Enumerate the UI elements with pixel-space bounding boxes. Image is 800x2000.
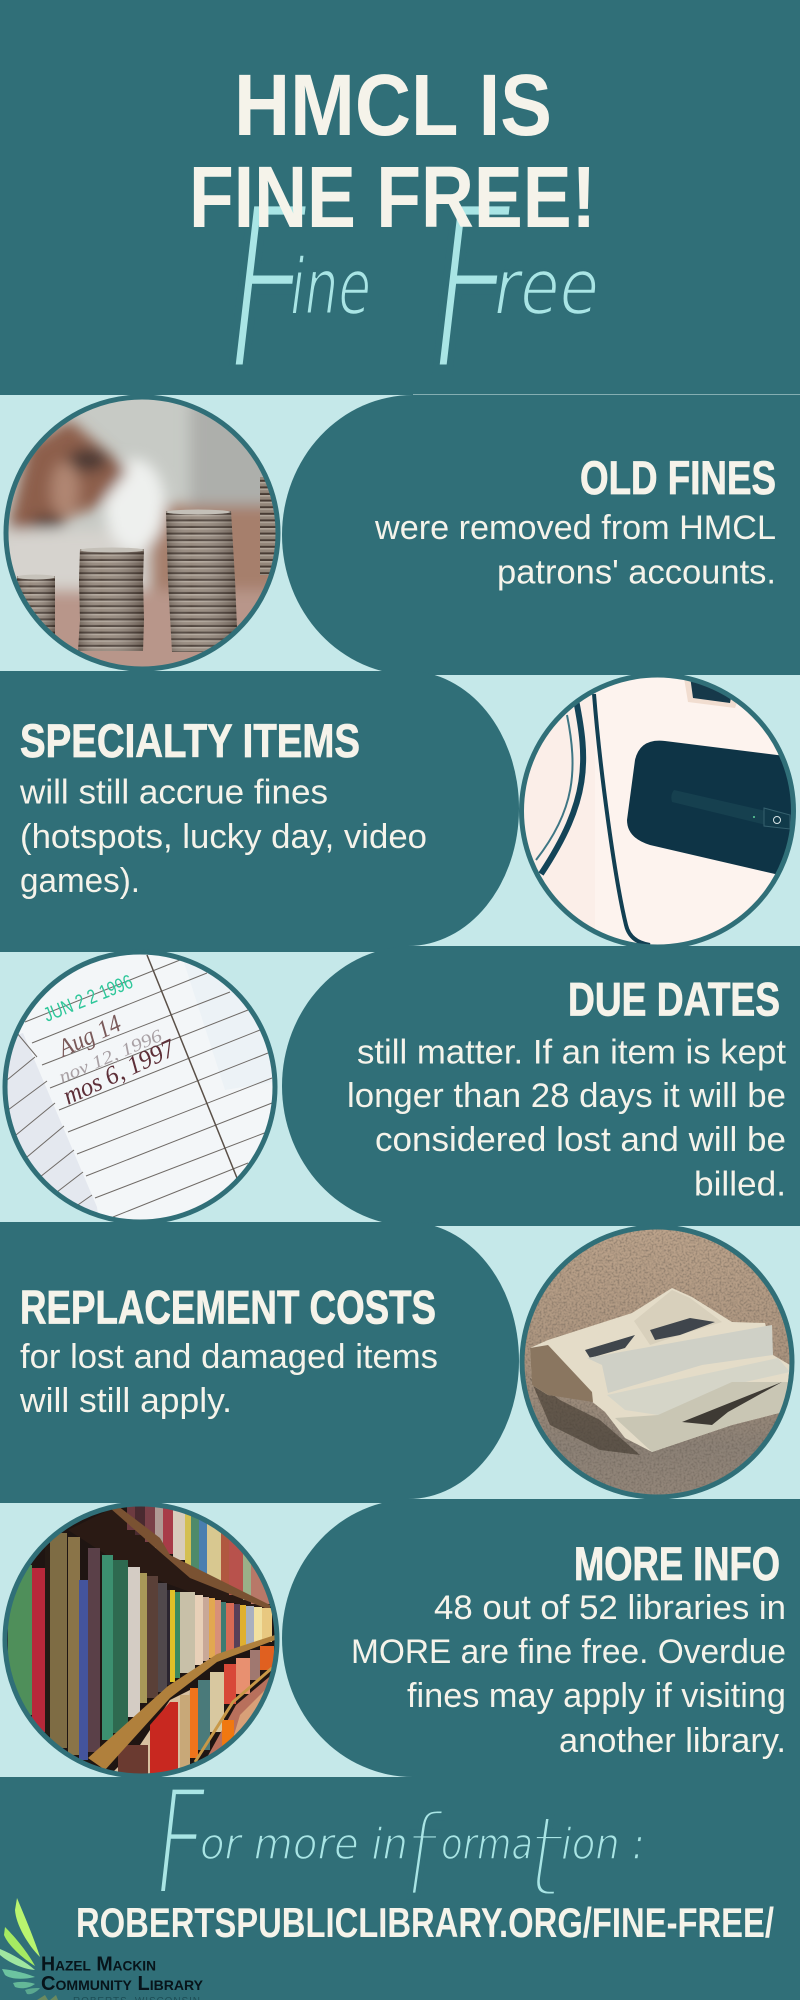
photo: ledger card: JUN 2 2 1996 — [41, 971, 136, 1027]
body: specialty items — [19, 774, 427, 900]
body: specialty items: (hotspots, lucky day, video — [20, 818, 427, 856]
body: replacement costs: will still apply. — [19, 1382, 232, 1420]
photo: ledger card: nov 12, 1996 — [56, 1025, 165, 1087]
body: due dates: still matter. If an item is kept — [357, 1034, 787, 1072]
logo: hazel mackin community library — [0, 1898, 204, 2000]
panel: due dates — [0, 946, 800, 1230]
photo: coin stacks — [0, 395, 285, 680]
body: due dates: longer than 28 days it will be — [347, 1077, 786, 1115]
panel: old fines — [0, 395, 800, 680]
script subtitle: F — [228, 155, 310, 425]
body: old fines: were removed from HMCL — [374, 509, 776, 547]
body: old fines: patrons' accounts. — [497, 554, 776, 592]
heading: replacement costs: REPLACEMENT COSTS — [20, 1280, 436, 1334]
photo: ledger card: mos 6, 1997 — [58, 1033, 180, 1110]
photo: ledger card — [0, 950, 285, 1230]
heading: specialty items: SPECIALTY ITEMS — [20, 714, 360, 767]
body: more info: fines may apply if visiting — [407, 1677, 786, 1715]
body: more info: another library. — [559, 1722, 786, 1760]
photo: weathered book on gravel — [515, 1222, 800, 1502]
title: HMCL IS — [234, 57, 552, 154]
logo wordmark: Community Library — [41, 1973, 204, 1995]
script call to action: or more in — [200, 1819, 408, 1870]
body: due dates: considered lost and will be — [375, 1121, 786, 1159]
body: more info: 48 out of 52 libraries in — [434, 1589, 786, 1627]
body: old fines — [374, 509, 776, 592]
script subtitle: F — [432, 155, 514, 425]
panel: more info — [0, 1499, 800, 1785]
script call to action: ion : — [561, 1819, 645, 1870]
photo: bookshelf — [0, 1500, 285, 1785]
logo wordmark — [41, 1954, 204, 2000]
icon: wing feathers — [0, 1898, 58, 2000]
body: specialty items: games). — [20, 862, 140, 900]
logo wordmark: Hazel Mackin — [41, 1954, 156, 1976]
body: due dates: billed. — [694, 1166, 786, 1204]
body: due dates — [347, 1034, 787, 1204]
body: replacement costs: for lost and damaged items — [20, 1338, 438, 1376]
script call to action: t — [528, 1790, 565, 1925]
script call to action: F — [156, 1757, 208, 1931]
panel: replacement costs — [0, 1222, 800, 1502]
body: replacement costs — [19, 1338, 438, 1420]
script subtitle: ine — [290, 243, 388, 333]
panel: specialty items — [0, 670, 800, 950]
body: specialty items: will still accrue fines — [19, 774, 328, 812]
script call to action: orma — [441, 1819, 533, 1870]
body: more info — [351, 1589, 786, 1760]
body: more info: MORE are fine free. Overdue — [351, 1633, 786, 1671]
title: FINE FREE! — [189, 149, 596, 246]
photo: ledger card: Aug 14 — [52, 1010, 125, 1063]
script subtitle: ree — [494, 243, 599, 333]
title — [189, 57, 596, 246]
script call to action: f — [404, 1789, 445, 1924]
photo: hotspot device — [515, 670, 800, 950]
